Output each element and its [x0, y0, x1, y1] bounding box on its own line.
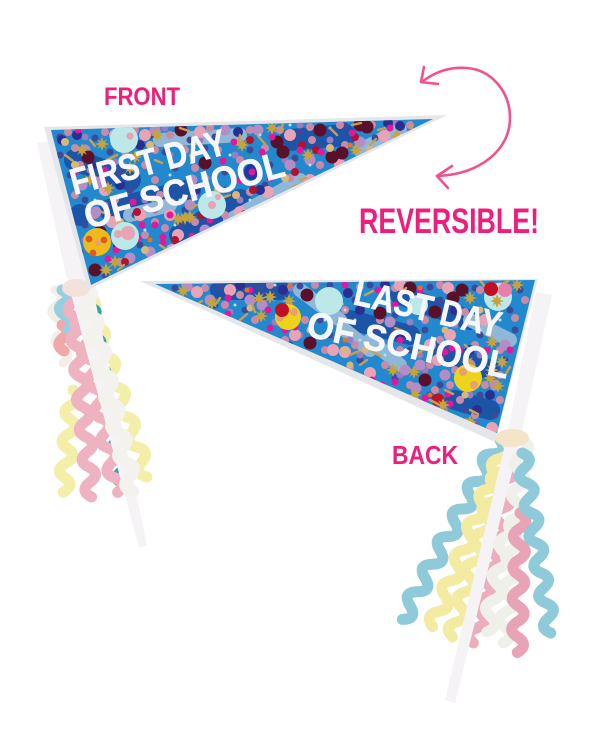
back knot — [495, 429, 529, 447]
back confetti — [175, 278, 525, 429]
large yellow circles — [275, 304, 482, 392]
front pennant flag with stick and ribbons — [37, 115, 447, 548]
back pennant flag with stick and ribbons — [140, 272, 553, 703]
front stick — [37, 141, 147, 548]
label: FRONT: FRONT — [104, 83, 180, 111]
front white ribbon — [83, 287, 134, 491]
front pennant body — [44, 115, 447, 290]
icon: curved reversible arrow — [421, 67, 510, 188]
back ribbons behind the stick — [402, 440, 518, 643]
large mint circles — [315, 283, 512, 315]
back ribbons in front of the stick — [486, 440, 553, 652]
back pennant body — [140, 272, 538, 442]
front confetti — [60, 121, 414, 277]
front knot — [62, 279, 90, 297]
front pennant text: FIRST DAY — [65, 122, 231, 203]
back pennant text: OF SCHOOL — [303, 304, 513, 387]
label: BACK: BACK — [392, 440, 458, 470]
front ribbons behind the stick — [52, 287, 147, 497]
back pennant text: LAST DAY — [350, 272, 506, 346]
back stick — [445, 292, 552, 703]
label: REVERSIBLE!: REVERSIBLE! — [359, 202, 539, 241]
front pennant text: OF SCHOOL — [79, 144, 289, 237]
back pennant text — [303, 272, 513, 387]
large yellow circle — [83, 228, 111, 256]
large mint circles — [110, 125, 226, 250]
